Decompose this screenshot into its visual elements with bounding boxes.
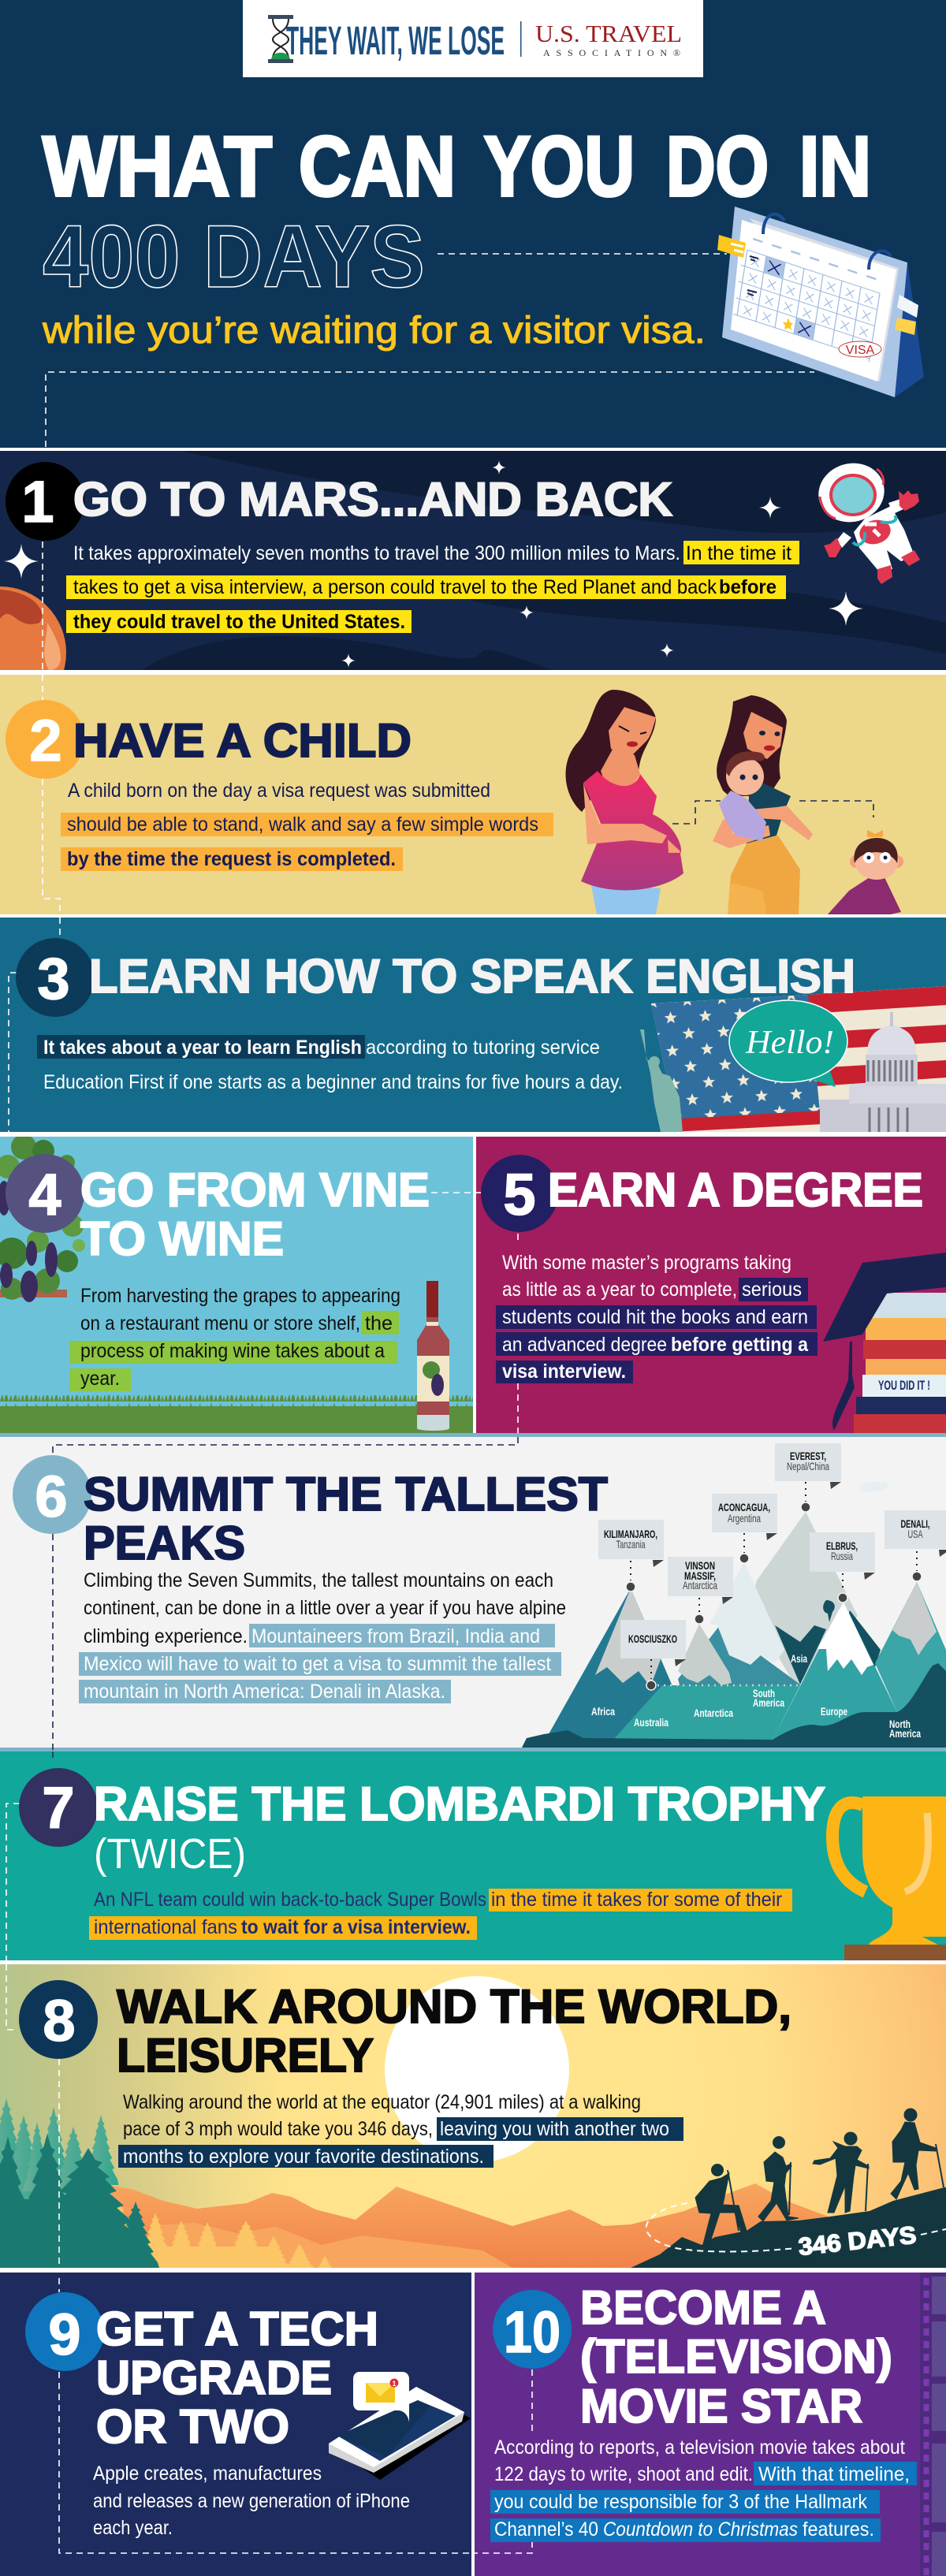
illustration: mountains	[522, 1443, 946, 1748]
mountain labels: Asia	[791, 1653, 807, 1665]
panel: 10 movie star	[471, 2273, 946, 2576]
illustration: dark trees	[0, 2134, 159, 2268]
text block: features.	[803, 2518, 874, 2541]
text block: An NFL team could win back-to-back Super Bowls	[94, 1889, 486, 1911]
stars	[4, 460, 863, 668]
heading: TO WINE	[80, 1212, 284, 1265]
illustration: dark hill	[631, 2187, 946, 2268]
icon: astronaut	[818, 463, 920, 584]
text block: before getting a	[671, 1334, 809, 1356]
number badge 1	[6, 462, 84, 541]
number badge 2	[6, 700, 84, 779]
mountain labels: Antarctica	[694, 1707, 733, 1719]
panel: 8 walk around the world	[0, 1964, 946, 2268]
text block: continent, can be done in a little over a year if you have alpine	[84, 1597, 566, 1619]
illustration: books and cap	[823, 1253, 946, 1433]
text block: Mountaineers from Brazil, India and	[251, 1625, 540, 1647]
panel: 7 lombardi	[0, 1751, 946, 1960]
hiker 3	[813, 2132, 869, 2213]
icon: film strip	[920, 2273, 946, 2576]
peak: aconcagua: ACONCAGUA,	[718, 1501, 770, 1513]
illustration: grape vine	[0, 1134, 85, 1302]
number badge 4	[6, 1154, 84, 1233]
title: IN	[799, 118, 871, 214]
number badge 6	[13, 1455, 91, 1534]
icon: wine bottle	[417, 1281, 449, 1431]
panel: 5 earn a degree	[476, 1137, 946, 1433]
text block: Walking around the world at the equator (24,901 miles) at a walking	[123, 2091, 641, 2113]
mountain labels: Africa	[591, 1706, 615, 1718]
heading: GO TO MARS...AND BACK	[73, 473, 672, 526]
heading: PEAKS	[84, 1517, 245, 1569]
heading: LEISURELY	[117, 2029, 374, 2082]
text block: Countdown to Christmas	[603, 2518, 798, 2541]
panel: 6 summit	[0, 1437, 946, 1751]
text block: visa interview.	[502, 1361, 626, 1383]
mountain labels: America	[753, 1697, 784, 1709]
icon: phone and message: 1	[392, 2380, 397, 2388]
text block: and releases a new generation of iPhone	[93, 2490, 410, 2512]
mountain labels: Australia	[634, 1717, 669, 1729]
text block: In the time it	[686, 542, 791, 564]
icon: hourglass	[268, 15, 293, 63]
text block: in the time it takes for some of their	[491, 1889, 782, 1911]
logo bar: U.S. TRAVEL	[535, 20, 682, 47]
text block	[61, 780, 553, 871]
text block: climbing experience.	[84, 1625, 248, 1647]
peak: denali: USA	[908, 1528, 923, 1540]
peak: aconcagua: Argentina	[728, 1512, 761, 1524]
logo bar: THEY WAIT, WE LOSE	[286, 18, 505, 63]
peak: denali	[885, 1510, 946, 1581]
number badge 5	[481, 1155, 558, 1232]
illustration: baby	[828, 830, 903, 914]
number badge 6: 6	[35, 1464, 68, 1529]
title: CAN	[299, 118, 456, 214]
text block	[89, 1889, 792, 1940]
heading: LEARN HOW TO SPEAK ENGLISH	[89, 950, 855, 1003]
peak: vinson: MASSIF,	[684, 1569, 716, 1582]
icon: trophy	[832, 1796, 946, 1960]
number badge 10	[493, 2290, 572, 2369]
text block: 122 days to write, shoot and edit.	[494, 2463, 753, 2485]
panel: 4 vine to wine	[0, 1134, 473, 1433]
text block: takes to get a visa interview, a person could travel to the Red Planet and back	[73, 576, 717, 598]
text block: mountain in North America: Denali in Alaska.	[84, 1681, 445, 1703]
number badge 1: 1	[21, 469, 54, 534]
hiker 4	[891, 2109, 944, 2199]
callout: hello bubble: Hello!	[745, 1025, 834, 1061]
heading: GET A TECH	[96, 2302, 378, 2355]
text block: Mexico will have to wait to get a visa to summit the tallest	[84, 1653, 551, 1675]
peak: everest: Nepal/China	[787, 1460, 829, 1472]
text block: According to reports, a television movie takes about	[494, 2436, 905, 2459]
peak: elbrus: ELBRUS,	[826, 1539, 858, 1552]
peak: denali: DENALI,	[900, 1517, 930, 1530]
title: WHAT	[43, 118, 272, 214]
text block: the	[365, 1312, 393, 1335]
number badge 3: 3	[37, 946, 70, 1011]
text block: months to explore your favorite destinations.	[123, 2146, 484, 2168]
peak: vinson	[668, 1557, 733, 1624]
number badge 10: 10	[504, 2299, 561, 2365]
logo bar	[243, 0, 703, 77]
callout: 346 days: 346 DAYS	[797, 2220, 918, 2261]
text block: From harvesting the grapes to appearing	[80, 1285, 400, 1307]
peak: kosciuszko	[620, 1620, 686, 1690]
number badge 7	[19, 1768, 98, 1847]
heading: EARN A DEGREE	[548, 1163, 923, 1216]
heading: 400 days outline: 400 DAYS	[43, 207, 425, 306]
illustration: capitol	[820, 1012, 946, 1132]
heading: WALK AROUND THE WORLD,	[117, 1980, 791, 2033]
heading: (TWICE)	[94, 1830, 246, 1878]
title: DO	[666, 118, 769, 214]
illustration: light trees	[0, 2098, 118, 2199]
heading	[84, 1468, 608, 1569]
peak: kilimanjaro: KILIMANJARO,	[604, 1528, 657, 1540]
logo bar: ASSOCIATION®	[543, 47, 680, 58]
text block: an advanced degree	[502, 1334, 667, 1356]
mountain labels	[591, 1653, 921, 1740]
text block: process of making wine takes about a	[80, 1340, 385, 1362]
text block: according to tutoring service	[366, 1037, 600, 1059]
text block: before	[719, 576, 777, 598]
heading: (TELEVISION)	[580, 2330, 892, 2383]
subtitle: while you’re waiting for a visitor visa.	[42, 310, 706, 352]
number badge 5: 5	[503, 1162, 536, 1227]
text block: should be able to stand, walk and say a few simple words	[67, 813, 538, 836]
heading: HAVE A CHILD	[73, 714, 412, 767]
text block	[66, 541, 799, 633]
illustration: mountains	[99, 2183, 867, 2268]
text block: With that timeline,	[758, 2463, 910, 2485]
text block: students could hit the books and earn	[502, 1306, 808, 1328]
number badge 2: 2	[29, 708, 62, 773]
text block: on a restaurant menu or store shelf,	[80, 1312, 360, 1335]
illustration: mother and baby	[713, 695, 813, 914]
mountain labels: South	[753, 1688, 775, 1699]
bottom strip: row 4-5	[0, 1433, 946, 1437]
text block: international fans	[94, 1916, 237, 1938]
number badge 9	[25, 2292, 104, 2371]
number badge 8: 8	[43, 1988, 76, 2053]
text block	[79, 1569, 566, 1703]
panel: 2 have a child	[0, 675, 946, 914]
peak: everest: EVEREST,	[790, 1450, 826, 1462]
illustration: grass	[0, 1395, 473, 1433]
panel: 9 tech upgrade	[0, 2273, 471, 2576]
title	[43, 118, 871, 214]
peak: vinson: VINSON	[685, 1559, 715, 1572]
number badge 7: 7	[42, 1775, 75, 1841]
panel: header	[0, 0, 946, 448]
peak: kilimanjaro: Tanzania	[616, 1538, 646, 1550]
hiker 1	[695, 2165, 747, 2244]
panel: 1 go to mars	[0, 451, 946, 670]
heading	[117, 1980, 791, 2082]
text block	[69, 1285, 400, 1391]
text block: serious	[742, 1279, 802, 1301]
text block	[93, 2462, 410, 2539]
text block: It takes approximately seven months to travel the 300 million miles to Mars.	[73, 542, 680, 564]
illustration: pregnant woman	[566, 690, 683, 914]
illustration: statue of liberty	[640, 1029, 683, 1132]
peak: elbrus	[810, 1532, 875, 1603]
hiker 2	[758, 2136, 799, 2221]
illustration: hikers	[695, 2109, 944, 2244]
text block: you could be responsible for 3 of the Hallmark	[494, 2491, 867, 2513]
text block	[490, 2436, 917, 2542]
peak: vinson: Antarctica	[683, 1579, 717, 1591]
text block: leaving you with another two	[440, 2118, 669, 2140]
text block	[37, 1035, 623, 1093]
heading: UPGRADE	[96, 2351, 332, 2404]
text block: they could travel to the United States.	[73, 611, 405, 633]
peak: everest	[775, 1443, 841, 1512]
heading	[80, 1171, 429, 1256]
peak: elbrus: Russia	[831, 1550, 853, 1562]
text block	[496, 1252, 818, 1383]
heading: BECOME A	[580, 2281, 826, 2334]
illustration: flag	[646, 981, 946, 1135]
text block: to wait for a visa interview.	[241, 1916, 471, 1938]
heading: MOVIE STAR	[580, 2380, 862, 2433]
text block: A child born on the day a visa request was submitted	[68, 780, 490, 802]
icon: calendar: VISA	[846, 344, 875, 357]
heading: GO FROM VINE	[80, 1163, 430, 1216]
text block: as little as a year to complete,	[502, 1279, 737, 1301]
text block: pace of 3 mph would take you 346 days,	[123, 2118, 433, 2140]
icon: sun	[385, 1976, 569, 2162]
heading: SUMMIT THE TALLEST	[84, 1468, 608, 1521]
mountain labels: North	[889, 1718, 911, 1730]
text block: by the time the request is completed.	[67, 848, 396, 870]
panel: 3 learn english	[0, 918, 946, 1135]
heading	[96, 2302, 378, 2453]
text block: Education First if one starts as a beginner and trains for five hours a day.	[43, 1071, 623, 1093]
text block: Climbing the Seven Summits, the tallest mountains on each	[84, 1569, 553, 1591]
heading	[94, 1778, 825, 1878]
text block: Apple creates, manufactures	[93, 2462, 322, 2485]
text block	[118, 2091, 683, 2168]
text block: each year.	[93, 2517, 173, 2539]
heading	[580, 2281, 892, 2433]
callout: hello bubble	[729, 1000, 847, 1087]
peak: kilimanjaro	[598, 1520, 664, 1591]
peak: kosciuszko: KOSCIUSZKO	[628, 1632, 677, 1645]
number badge 8	[19, 1980, 98, 2059]
peak: aconcagua	[712, 1494, 777, 1563]
mountain labels: Europe	[821, 1706, 847, 1718]
icon: calendar	[717, 207, 924, 397]
illustration: mars	[0, 586, 66, 670]
text block: It takes about a year to learn English	[43, 1037, 362, 1059]
icon: phone and message	[329, 2372, 471, 2480]
number badge 9: 9	[48, 2302, 81, 2367]
number badge 3	[16, 938, 95, 1017]
text block: year.	[80, 1368, 120, 1390]
mountain labels: America	[889, 1728, 921, 1740]
heading: RAISE THE LOMBARDI TROPHY	[94, 1778, 825, 1830]
text block: Channel’s 40	[494, 2518, 598, 2541]
heading: OR TWO	[96, 2400, 289, 2453]
illustration: yellow trees	[99, 2202, 332, 2268]
number badge 4: 4	[28, 1162, 61, 1227]
text block: With some master’s programs taking	[502, 1252, 791, 1274]
title: YOU	[484, 118, 635, 214]
